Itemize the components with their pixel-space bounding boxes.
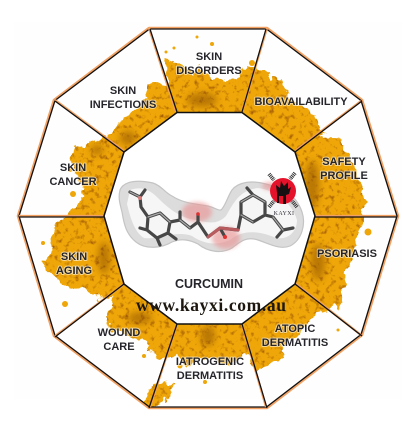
label: safety profile: PROFILE bbox=[320, 170, 368, 182]
logo red disc bbox=[270, 178, 296, 204]
label: iatrogenic dermatitis: IATROGENIC bbox=[176, 356, 244, 368]
label: bioavailability: BIOAVAILABILITY bbox=[254, 96, 348, 108]
logo: KAYXI badge bbox=[269, 173, 297, 217]
molecular surface bbox=[119, 181, 304, 251]
powder: atopic dermatitis bbox=[243, 288, 342, 372]
powder: skin infections bbox=[107, 82, 170, 150]
powder: psoriasis bbox=[290, 210, 362, 310]
label: skin infections: SKIN bbox=[110, 85, 136, 97]
label: wound care: CARE bbox=[103, 341, 135, 353]
label: skin disorders: SKIN bbox=[196, 51, 222, 63]
logo wordmark: KAYXI bbox=[274, 211, 294, 217]
central white octagon bbox=[104, 112, 315, 324]
label: safety profile: SAFETY bbox=[322, 156, 366, 168]
label: atopic dermatitis: ATOPIC bbox=[275, 323, 315, 335]
label: wound care: WOUND bbox=[98, 327, 140, 339]
label: psoriasis: PSORIASIS bbox=[317, 248, 377, 260]
curcumin molecule bbox=[119, 181, 304, 251]
watermark url: www.kayxi.com.au bbox=[136, 295, 286, 315]
powder: safety profile bbox=[297, 135, 368, 213]
pink charge regions bbox=[182, 182, 278, 249]
powder: skin cancer bbox=[60, 138, 128, 224]
label: skin cancer: SKIN bbox=[60, 162, 86, 174]
label: atopic dermatitis: DERMATITIS bbox=[262, 337, 328, 349]
powder: skin aging bbox=[42, 220, 122, 302]
scattered powder specks bbox=[41, 36, 372, 384]
label: skin infections: INFECTIONS bbox=[90, 99, 156, 111]
powder: iatrogenic dermatitis bbox=[177, 324, 246, 368]
label: skin disorders: DISORDERS bbox=[176, 65, 242, 77]
label: skin aging: SKIN bbox=[61, 251, 87, 263]
powder: wound care lower bbox=[146, 382, 176, 405]
stick bonds bbox=[130, 188, 293, 245]
label: iatrogenic dermatitis: DERMATITIS bbox=[177, 370, 243, 382]
center title: CURCUMIN bbox=[175, 277, 243, 291]
powder texture bbox=[41, 36, 372, 405]
powder: skin disorders bbox=[164, 58, 257, 112]
powder dark shading bbox=[91, 93, 325, 346]
powder: wound care bbox=[106, 288, 177, 360]
logo black figure bbox=[276, 181, 291, 204]
powder: bioavailability bbox=[249, 69, 326, 150]
logo trigrams bbox=[269, 173, 297, 207]
segment labels bbox=[49, 51, 377, 382]
label: skin aging: AGING bbox=[56, 265, 92, 277]
label: skin cancer: CANCER bbox=[49, 176, 97, 188]
inner surface highlight bbox=[127, 188, 297, 243]
